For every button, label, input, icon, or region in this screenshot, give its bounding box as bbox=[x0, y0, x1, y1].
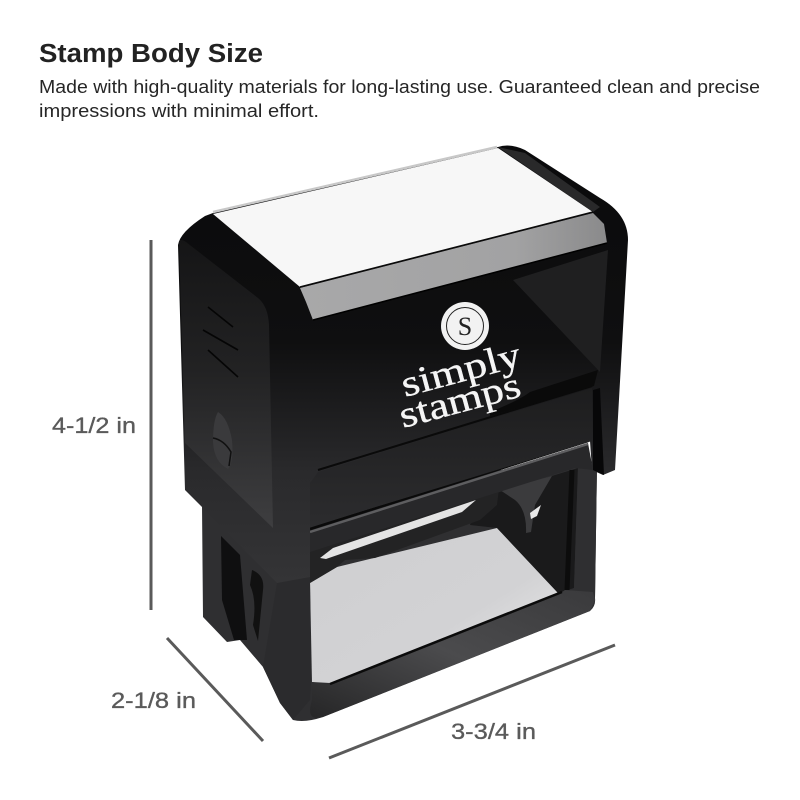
left frame post bbox=[263, 577, 311, 720]
height label: 4-1/2 in bbox=[52, 413, 136, 438]
height dimension line bbox=[150, 240, 152, 610]
front bottom lip bbox=[310, 590, 595, 718]
side opening and mechanism bbox=[221, 536, 247, 640]
description text: impressions with minimal effort. bbox=[39, 100, 319, 121]
clear hinge strip bbox=[300, 213, 607, 320]
width label: 3-3/4 in bbox=[451, 719, 536, 744]
right side tab bbox=[593, 388, 604, 475]
stamp window paper area bbox=[310, 528, 558, 683]
lower body front band bbox=[310, 388, 592, 527]
side vent lines bbox=[203, 307, 238, 377]
logo seal: S bbox=[458, 312, 472, 341]
front glossy reflection bbox=[513, 250, 608, 372]
stamp lower frame bbox=[202, 465, 597, 721]
width dimension line bbox=[329, 645, 615, 758]
depth label: 2-1/8 in bbox=[111, 688, 196, 713]
logo wordmark: simply bbox=[397, 334, 526, 406]
side button bbox=[213, 412, 232, 469]
logo seal bbox=[441, 302, 489, 350]
stamp illustration bbox=[178, 146, 628, 721]
inner right wall bbox=[470, 468, 578, 593]
description text: Made with high-quality materials for long-lasting use. Guaranteed clean and precise bbox=[39, 76, 760, 97]
cross bar bbox=[310, 443, 593, 552]
top white label bbox=[213, 148, 593, 287]
inner back shelf with white slit bbox=[310, 480, 500, 583]
side panel bbox=[179, 240, 273, 528]
logo wordmark: stamps bbox=[395, 365, 525, 437]
logo wordmark bbox=[395, 334, 526, 437]
body upper shell bbox=[178, 146, 628, 583]
title: Stamp Body Size bbox=[39, 40, 263, 68]
description text bbox=[39, 76, 760, 121]
depth dimension line bbox=[167, 638, 263, 741]
